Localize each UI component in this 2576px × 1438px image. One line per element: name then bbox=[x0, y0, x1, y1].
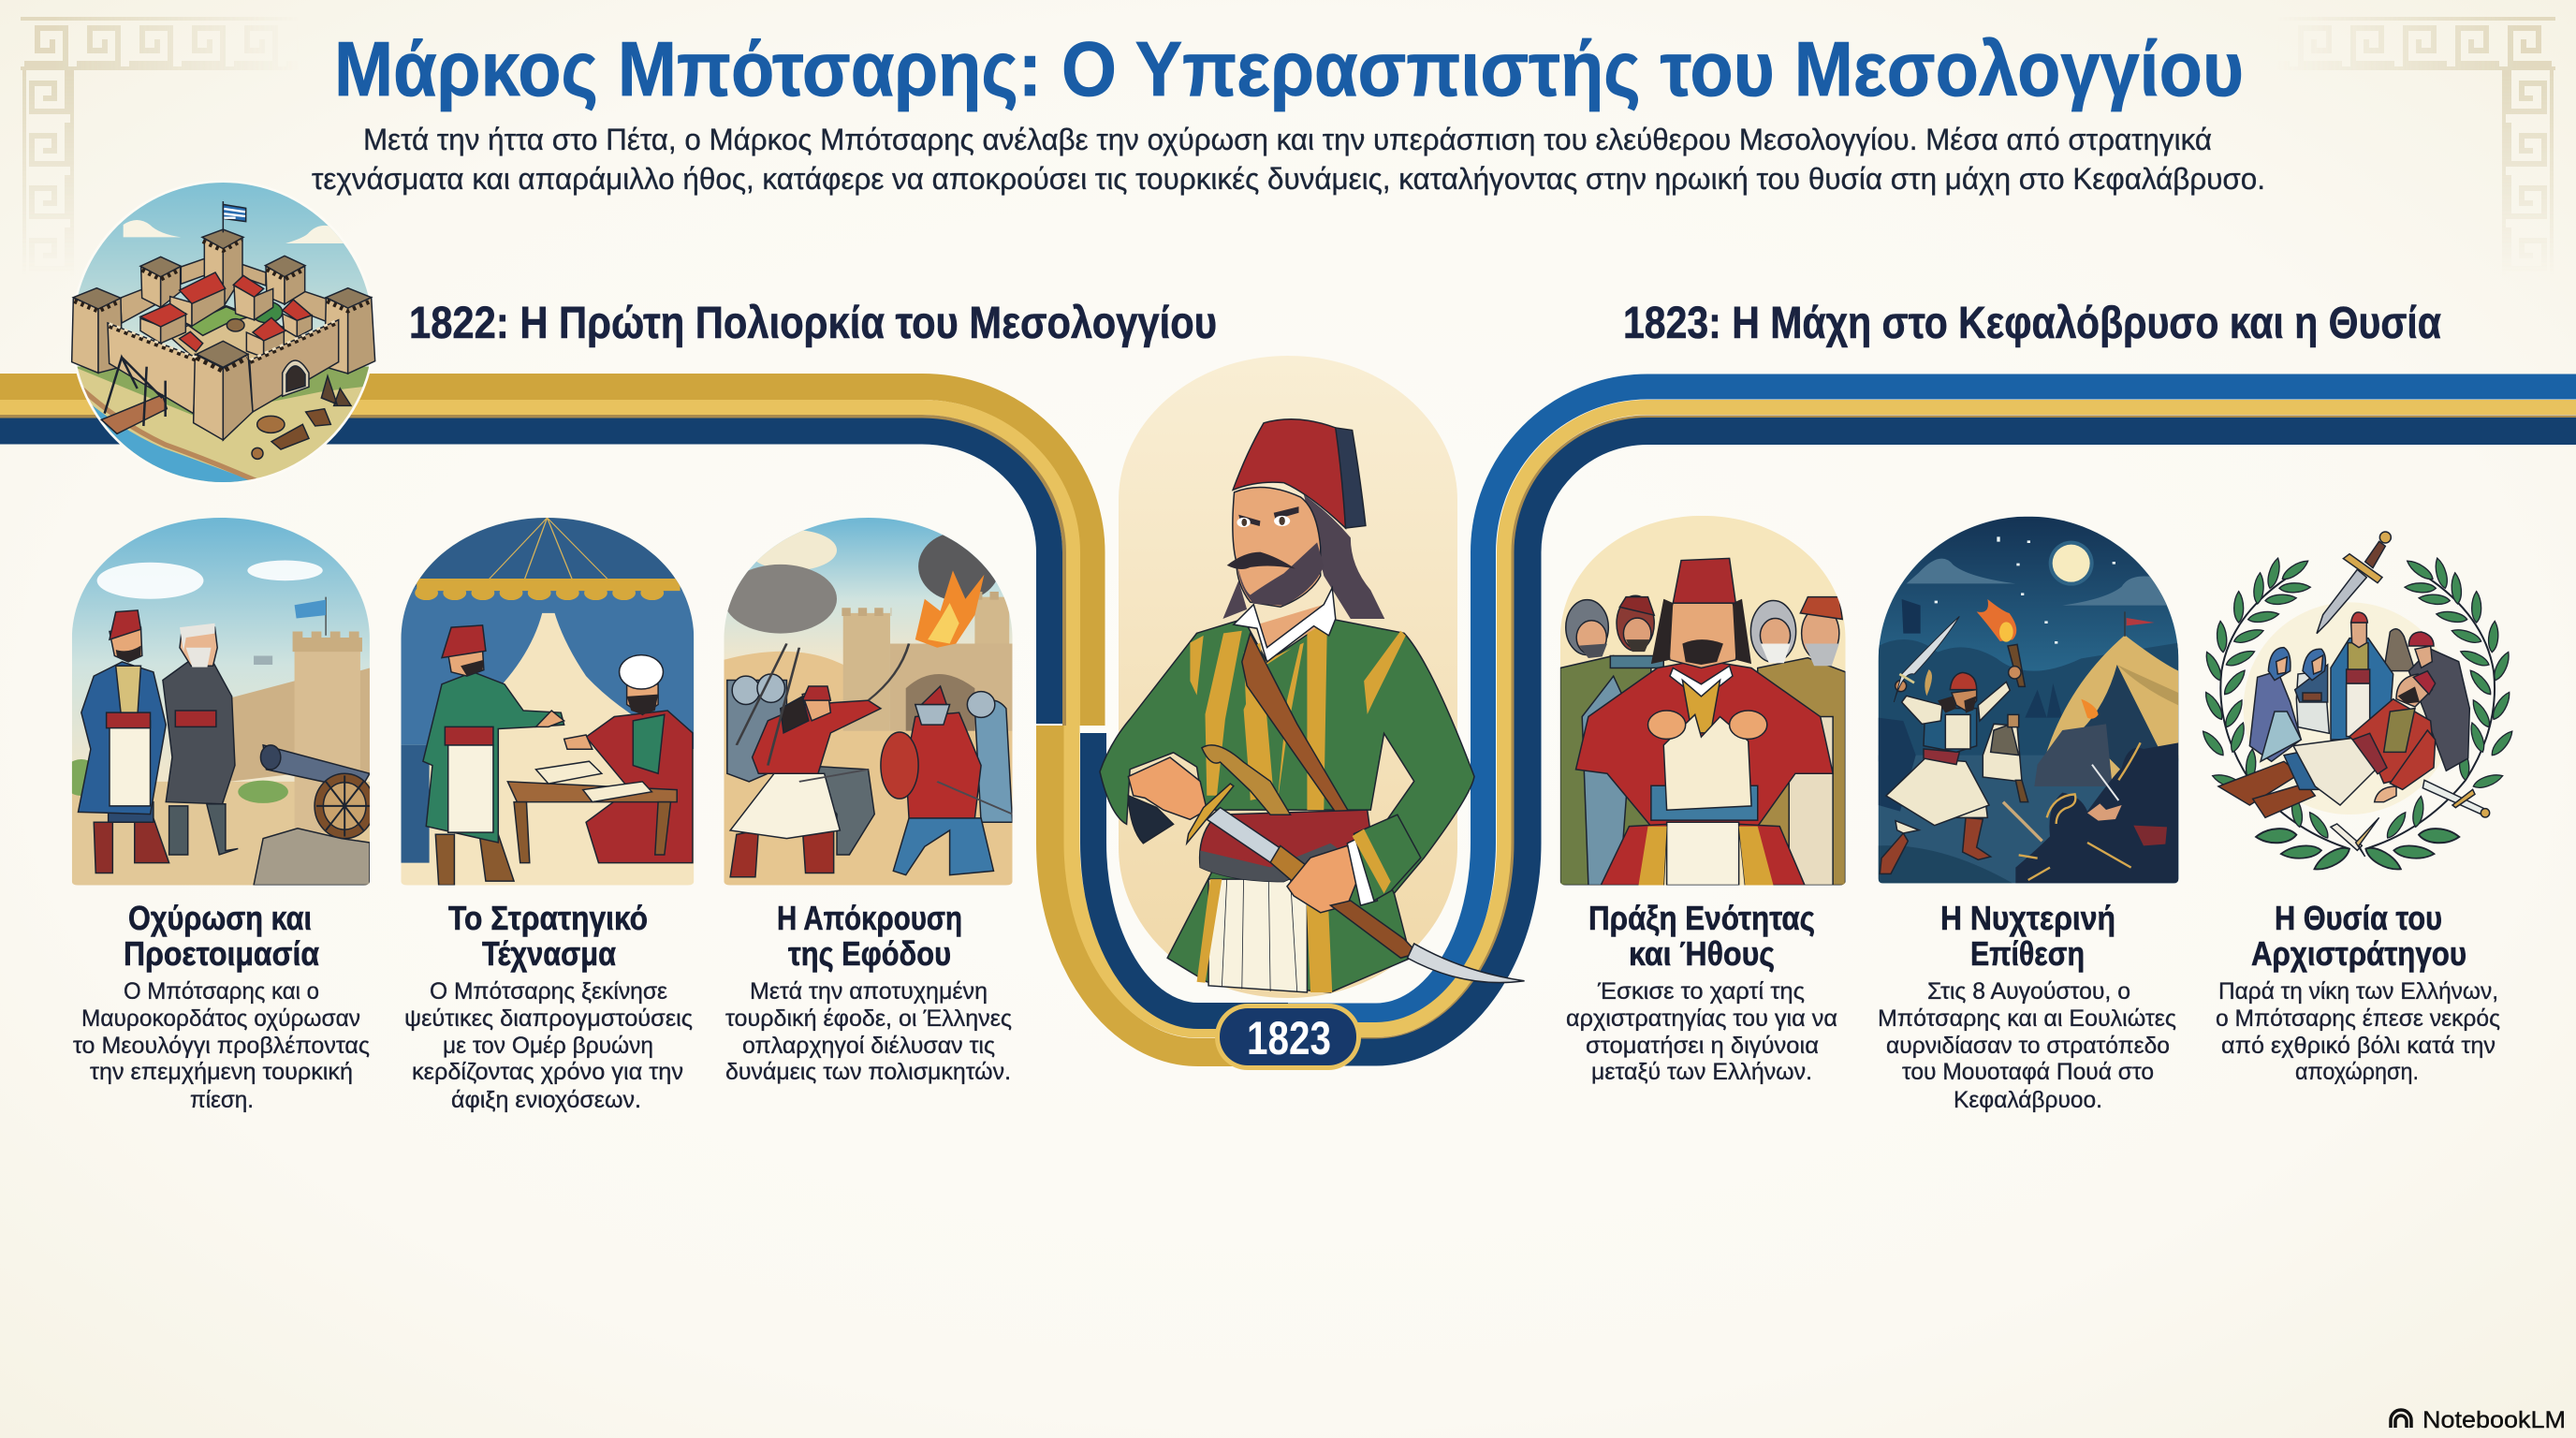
heading: Η Θυσία του bbox=[2275, 899, 2442, 937]
body text: Ο Μπότσαρης και ο bbox=[124, 978, 319, 1005]
heading: Το Στρατηγικό bbox=[448, 899, 648, 937]
body text: από εχθρικό βόλι κατά την bbox=[2221, 1033, 2496, 1059]
panel: step 2 stratagem bbox=[401, 518, 695, 1113]
section heading 1822: 1822: Η Πρώτη Πολιορκία του Μεσολογγίου bbox=[409, 299, 1217, 348]
year badge 1823 bbox=[1215, 1004, 1361, 1070]
subtitle bbox=[312, 123, 2265, 196]
body text: κερδίζοντας χρόνο για την bbox=[412, 1059, 683, 1085]
body text: άφιξη ενιοχόσεων. bbox=[451, 1087, 641, 1113]
body text: αυρνιδίασαν το στρατόπεδο bbox=[1886, 1033, 2170, 1059]
heading bbox=[1588, 899, 1815, 973]
body text: Μαυροκορδάτος οχύρωσαν bbox=[81, 1005, 360, 1032]
panel: step 3 repelling the assault bbox=[724, 518, 1013, 1085]
illustration: negotiation in the tent bbox=[401, 518, 695, 885]
body text bbox=[1566, 978, 1837, 1085]
heading bbox=[124, 899, 319, 973]
body text bbox=[73, 978, 370, 1113]
heading bbox=[2251, 899, 2466, 973]
NotebookLM watermark: NotebookLM bbox=[2422, 1407, 2566, 1433]
decorative meander corner left bbox=[21, 17, 301, 281]
section heading 1823: 1823: Η Μάχη στο Κεφαλόβρυσο και η Θυσία bbox=[1623, 299, 2441, 348]
subtitle: τεχνάσματα και απαράμιλλο ήθος, κατάφερε να αποκρούσει τις τουρκικές δυνάμεις, καταλήγοντας στην ηρωική του θυσία στη μάχη στο Κεφαλάβρυσο. bbox=[312, 162, 2265, 196]
body text: με τον Ομέρ βρυώνη bbox=[443, 1033, 653, 1059]
illustration: Botsaris and Mavrokordatos by the cannon bbox=[63, 518, 374, 885]
year badge 1823: 1823 bbox=[1247, 1012, 1331, 1064]
body text: αποχώρηση. bbox=[2295, 1059, 2419, 1085]
body text: Κεφαλάβρυοο. bbox=[1954, 1087, 2102, 1113]
central arch backdrop bbox=[1119, 356, 1457, 998]
body text: Παρά τη νίκη των Ελλήνων, bbox=[2218, 978, 2498, 1005]
body text: στοματήσει η διγύνοια bbox=[1586, 1033, 1819, 1059]
timeline ribbon left bbox=[0, 387, 1288, 1052]
heading: Πράξη Ενότητας bbox=[1588, 899, 1815, 937]
body text: Έσκισε το χαρτί της bbox=[1597, 978, 1805, 1005]
heading: Τέχνασμα bbox=[482, 934, 616, 973]
body text: του Μουοταφά Πουά στο bbox=[1902, 1059, 2154, 1085]
body text: οπλαρχηγοί διέλυσαν τις bbox=[742, 1033, 995, 1059]
body text bbox=[2216, 978, 2500, 1085]
body text: μεταξύ των Ελλήνων. bbox=[1591, 1059, 1812, 1085]
illustration: fortress of Messolonghi bbox=[71, 180, 377, 485]
heading: Προετοιμασία bbox=[124, 934, 319, 973]
heading: Επίθεση bbox=[1970, 934, 2085, 973]
heading bbox=[777, 899, 962, 973]
body text: Μετά την αποτυχημένη bbox=[750, 978, 988, 1005]
illustration: night raid on the camp bbox=[1879, 517, 2179, 885]
heading: και Ήθους bbox=[1629, 934, 1775, 973]
body text: αρχιστρατηγίας του για να bbox=[1566, 1005, 1837, 1032]
heading: της Εφόδου bbox=[788, 934, 951, 973]
portrait: Markos Botsaris bbox=[1100, 419, 1525, 992]
body text: την επεμχήμενη τουρκική bbox=[90, 1059, 353, 1085]
illustration: battle at the breached wall bbox=[724, 518, 1013, 885]
subtitle: Μετά την ήττα στο Πέτα, ο Μάρκος Μπότσαρης ανέλαβε την οχύρωση και την υπεράσπιση του ελεύθερου Μεσολογγίου. Μέσα από στρατηγικά bbox=[363, 123, 2212, 156]
panel: step 4 unity and ethos bbox=[1560, 516, 1846, 1085]
body text bbox=[1878, 978, 2176, 1113]
body text: δυνάμεις των πολισμκητών. bbox=[725, 1059, 1011, 1085]
body text: Στις 8 Αυγούστου, ο bbox=[1927, 978, 2130, 1005]
body text: το Μεουλόγγι προβλέποντας bbox=[73, 1033, 370, 1059]
heading bbox=[448, 899, 648, 973]
body text: πίεση. bbox=[190, 1087, 254, 1113]
heading: Αρχιστράτηγου bbox=[2251, 934, 2466, 973]
decorative meander corner right bbox=[2275, 17, 2555, 281]
body text: τουρδική έφοδε, οι Έλληνες bbox=[725, 1005, 1012, 1032]
title: Μάρκος Μπότσαρης: Ο Υπερασπιστής του Μεσολογγίου bbox=[334, 25, 2244, 112]
panel: step 5 night attack bbox=[1878, 517, 2179, 1113]
body text: Ο Μπότσαρης ξεκίνησε bbox=[430, 978, 667, 1005]
illustration: fallen Botsaris in a laurel wreath bbox=[2200, 532, 2516, 874]
body text bbox=[725, 978, 1012, 1085]
body text: ο Μπότσαρης έπεσε νεκρός bbox=[2216, 1005, 2500, 1032]
heading bbox=[1940, 899, 2115, 973]
body text: Μπότσαρης και αι Εουλιώτες bbox=[1878, 1005, 2176, 1032]
illustration: Botsaris tearing the commission bbox=[1560, 516, 1846, 885]
heading: Οχύρωση και bbox=[128, 899, 312, 937]
body text: ψεύτικες διαπρογμστούσεις bbox=[404, 1005, 693, 1032]
panel: step 1 fortification bbox=[63, 518, 374, 1113]
body text bbox=[404, 978, 693, 1113]
panel: step 6 sacrifice bbox=[2200, 532, 2516, 1085]
heading: Η Νυχτερινή bbox=[1940, 899, 2115, 937]
heading: Η Απόκρουση bbox=[777, 899, 962, 937]
timeline ribbon right bbox=[1288, 387, 2576, 1052]
